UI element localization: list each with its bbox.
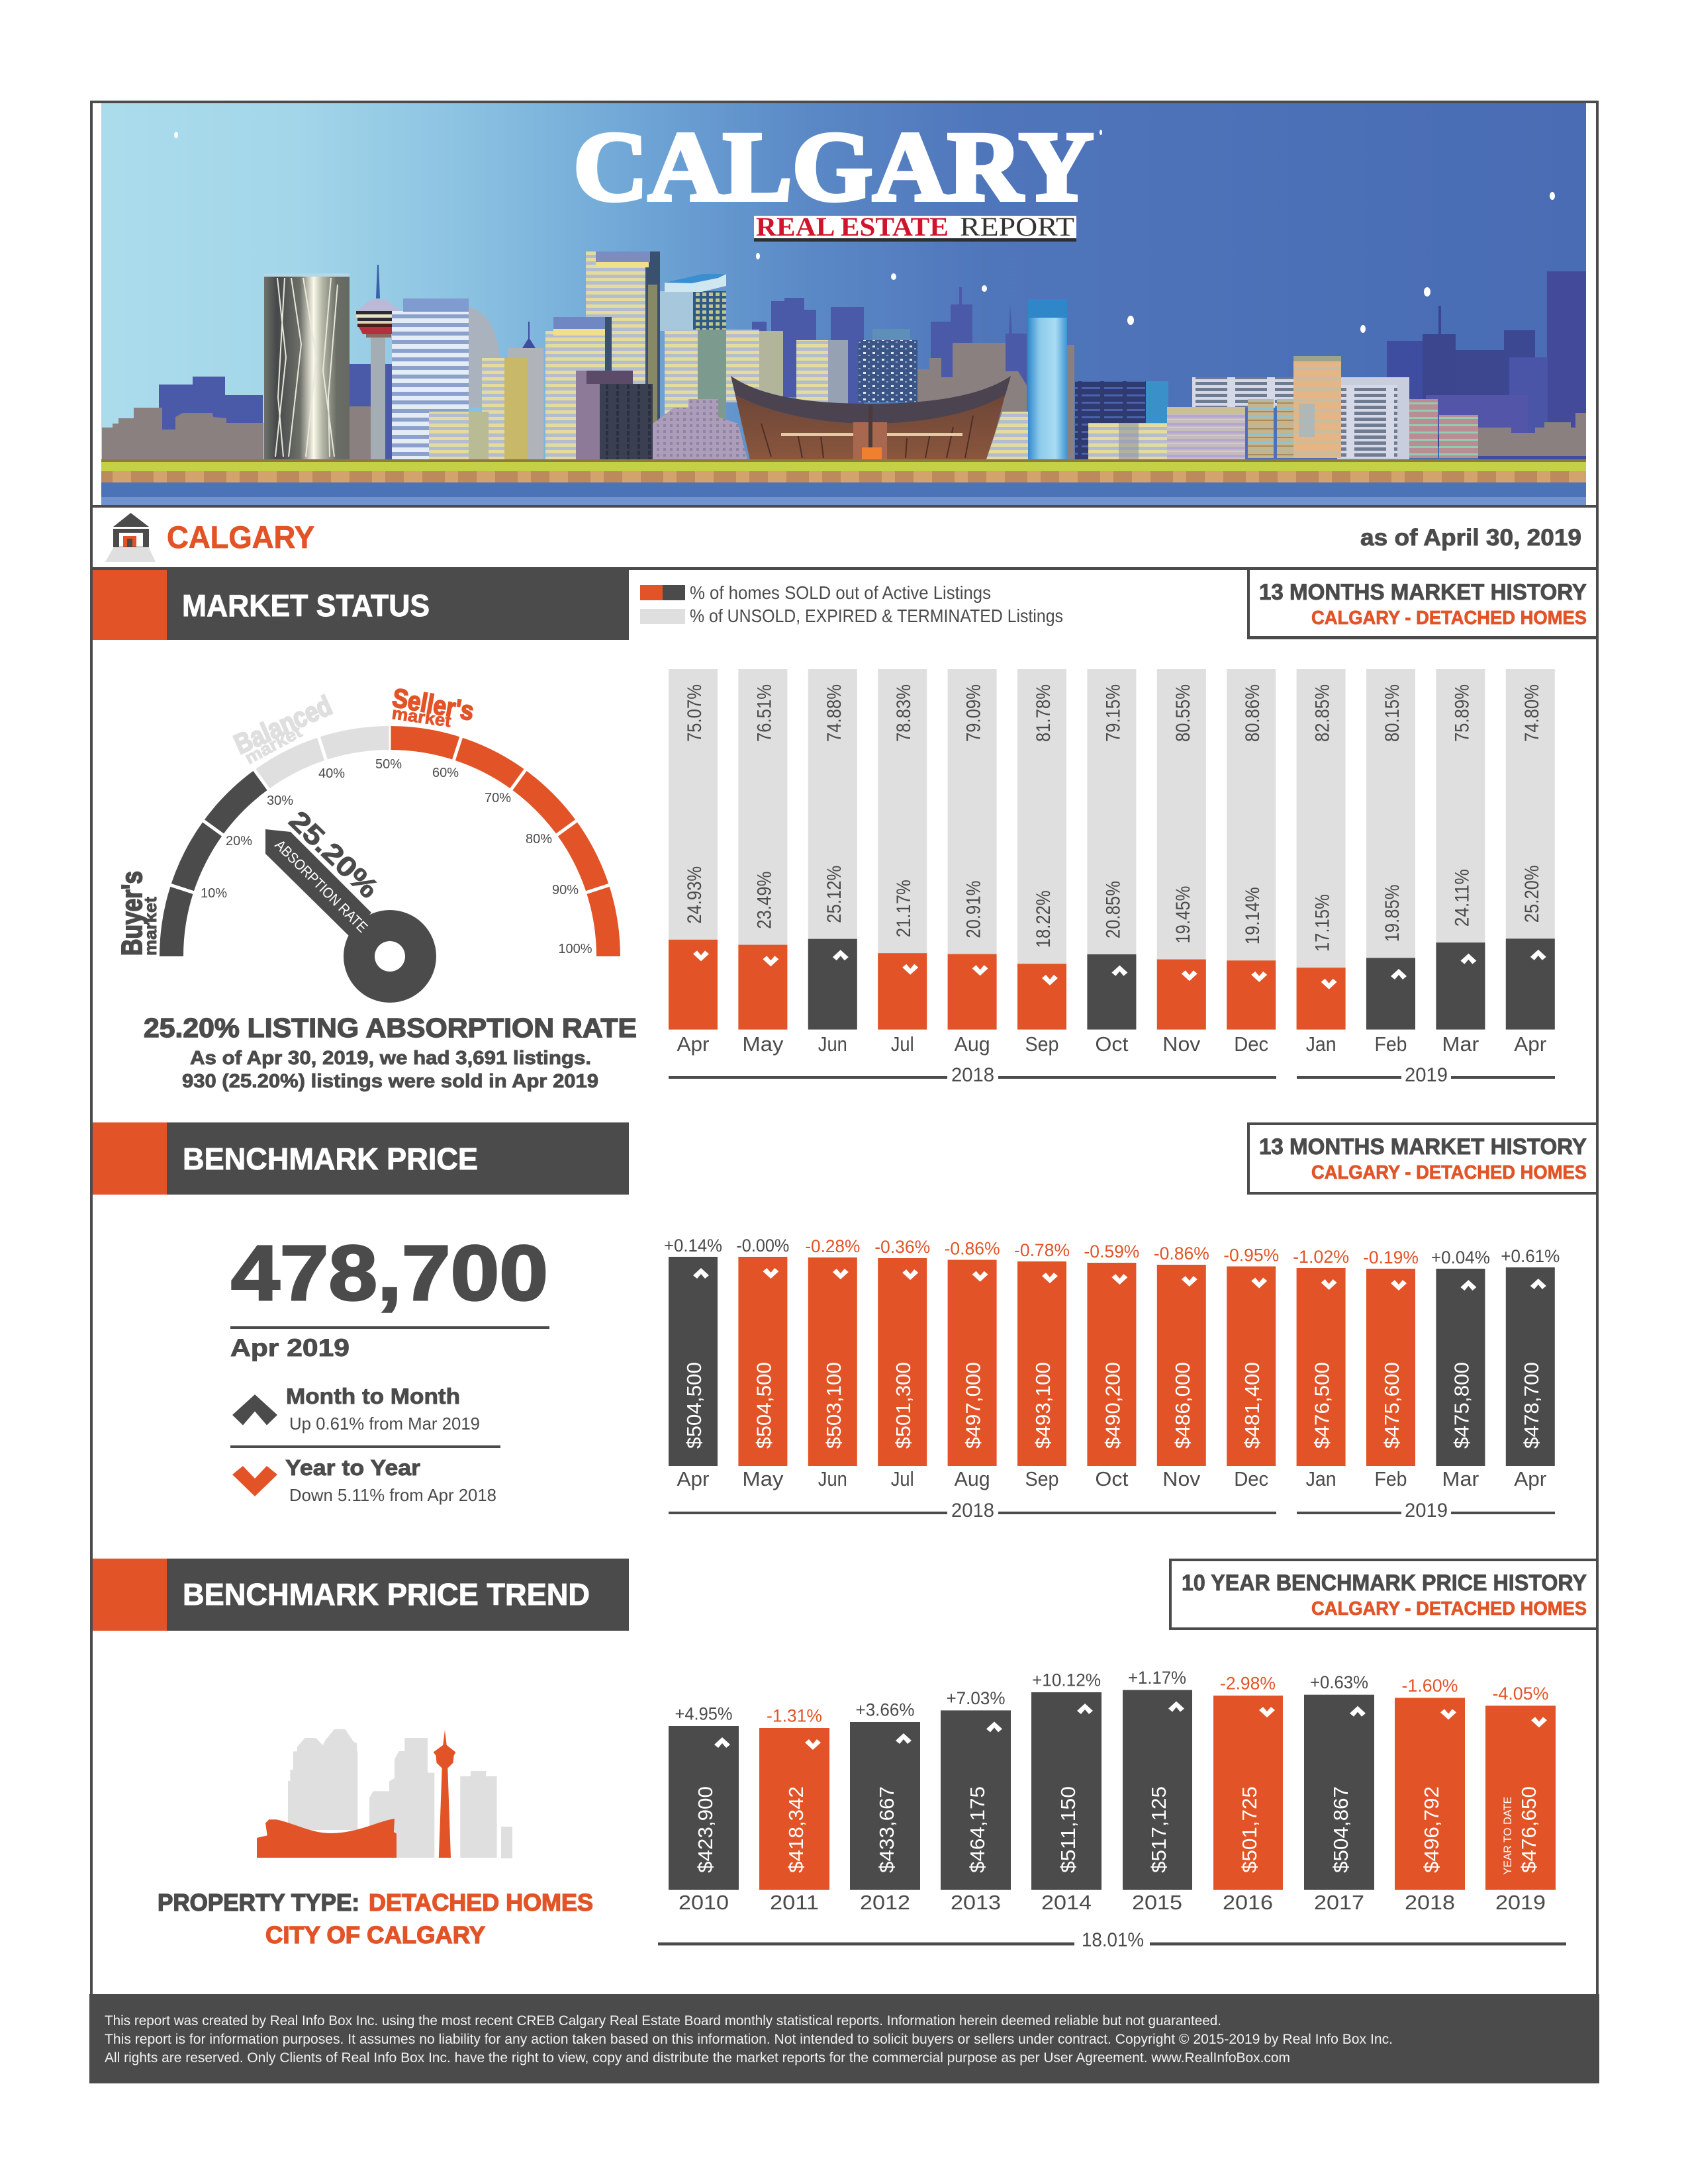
banner subtitle bbox=[754, 212, 1076, 242]
bar: Jul 2018: Jul bbox=[891, 1032, 914, 1056]
bar: Oct 2018 bbox=[1087, 669, 1136, 1056]
The Bow tower bbox=[264, 273, 350, 462]
grey skyline bbox=[102, 343, 1074, 462]
bar: Feb 2019 bbox=[1363, 1248, 1419, 1490]
bar: Oct 2018: Oct bbox=[1095, 1032, 1129, 1056]
bar: Sep 2018: Sep bbox=[1025, 1467, 1059, 1490]
month to month change: Month to Month bbox=[286, 1384, 460, 1408]
price value: 478,700 bbox=[231, 1230, 548, 1317]
bar: 2010: $423,900 bbox=[694, 1786, 717, 1873]
market zone labels: Balanced bbox=[230, 690, 336, 760]
bar: 2016: 2016 bbox=[1223, 1891, 1273, 1914]
bar: Nov 2018: $486,000 bbox=[1171, 1362, 1194, 1449]
report date: as of April 30, 2019 bbox=[1360, 525, 1581, 551]
market zone labels bbox=[116, 684, 476, 956]
bar: 2017: +0.63% bbox=[1310, 1672, 1368, 1692]
bar: Sep 2018: -0.78% bbox=[1014, 1240, 1070, 1260]
gauge needle: 25.20% bbox=[283, 805, 385, 904]
footer disclaimer: This report is for information purposes. It assumes no liability for any action taken based on this information. Not intended to solicit buyers or sellers under contract. Copyright © 2015-2019 by Real Info Box Inc. bbox=[105, 2032, 1393, 2047]
bar: Apr 2018: +0.14% bbox=[664, 1236, 722, 1255]
bar: Apr 2018: Apr bbox=[677, 1032, 710, 1056]
bar: Nov 2018: 19.45% bbox=[1172, 886, 1194, 944]
bar: Jan 2019 bbox=[1293, 1247, 1349, 1490]
year axis: 2018 bbox=[951, 1064, 994, 1086]
bar: 2014: +10.12% bbox=[1032, 1670, 1101, 1690]
bar: 2010: +4.95% bbox=[675, 1704, 732, 1723]
bar: May 2018 bbox=[738, 669, 787, 1056]
bar: 2011: $418,342 bbox=[784, 1786, 808, 1873]
absorption summary: As of Apr 30, 2019, we had 3,691 listings. bbox=[190, 1048, 591, 1069]
bar: 2019: -4.05% bbox=[1492, 1684, 1549, 1704]
bar: Jan 2019: 82.85% bbox=[1312, 684, 1334, 742]
bar: 2019 bbox=[1485, 1684, 1556, 1914]
bar: May 2018: May bbox=[742, 1467, 784, 1490]
bar: Jan 2019 bbox=[1297, 669, 1346, 1056]
month to month change bbox=[286, 1384, 480, 1433]
month to month change: Up 0.61% from Mar 2019 bbox=[289, 1414, 480, 1433]
bar: Sep 2018: 81.78% bbox=[1033, 684, 1055, 742]
bar: Jul 2018: 78.83% bbox=[893, 684, 915, 742]
bar: 2019: $476,650 bbox=[1517, 1786, 1540, 1873]
back skyline left bbox=[159, 287, 1027, 461]
bar: Sep 2018 bbox=[1014, 1240, 1070, 1490]
title box: 13 months market history: CALGARY - DETACHED HOMES bbox=[1311, 608, 1587, 629]
absorption summary: 930 (25.20%) listings were sold in Apr 2019 bbox=[182, 1071, 598, 1092]
Saddledome bbox=[731, 376, 1011, 461]
bar: Jun 2018: Jun bbox=[818, 1467, 847, 1490]
bar: 2013: +7.03% bbox=[947, 1688, 1005, 1708]
bar: May 2018: -0.00% bbox=[736, 1236, 789, 1255]
bar: Sep 2018 bbox=[1017, 669, 1066, 1056]
bar: 2012: 2012 bbox=[860, 1891, 910, 1914]
bar: 2014 bbox=[1031, 1670, 1102, 1914]
bar: 2012: +3.66% bbox=[855, 1700, 915, 1719]
bar: Jul 2018: 21.17% bbox=[893, 880, 915, 937]
icon: house bbox=[105, 513, 156, 562]
bar: 2010: 2010 bbox=[679, 1891, 729, 1914]
bar: Oct 2018: Oct bbox=[1095, 1467, 1129, 1490]
icon: down chevron bbox=[232, 1466, 277, 1496]
bar: 2011 bbox=[759, 1706, 829, 1914]
bar: Jun 2018: 74.88% bbox=[823, 684, 845, 742]
bar: Mar 2019: +0.04% bbox=[1431, 1248, 1490, 1267]
bar: May 2018: $504,500 bbox=[752, 1362, 775, 1449]
banner subtitle: REAL ESTATE bbox=[756, 212, 949, 242]
gauge scale labels: 40% bbox=[318, 766, 345, 781]
bar: Jul 2018 bbox=[878, 669, 927, 1056]
bar: 2011: -1.31% bbox=[767, 1706, 822, 1726]
bar: 2016 bbox=[1213, 1673, 1283, 1914]
bar: Apr 2019 bbox=[1506, 669, 1555, 1056]
title box: 13 months market history bbox=[1247, 567, 1599, 639]
bar: Mar 2019: Mar bbox=[1442, 1032, 1479, 1056]
gauge scale labels: 100% bbox=[558, 942, 592, 956]
year to year change bbox=[285, 1455, 496, 1505]
legend: % of UNSOLD, EXPIRED & TERMINATED Listings bbox=[690, 606, 1063, 626]
bar: Nov 2018: 80.55% bbox=[1172, 684, 1194, 742]
year to year change: Year to Year bbox=[285, 1455, 420, 1480]
gauge scale labels bbox=[201, 757, 592, 956]
bar: Dec 2018: 19.14% bbox=[1242, 887, 1264, 944]
bar: Apr 2018: 24.93% bbox=[684, 866, 706, 924]
title box: 13 months market history: 13 MONTHS MARKET HISTORY bbox=[1259, 580, 1587, 605]
bar: 2017 bbox=[1304, 1672, 1374, 1914]
price date: Apr 2019 bbox=[230, 1334, 350, 1361]
bar: 2015: +1.17% bbox=[1128, 1668, 1186, 1688]
market zone labels: Seller's bbox=[390, 684, 476, 726]
bar: 2015 bbox=[1123, 1668, 1192, 1914]
bar: Jan 2019: Jan bbox=[1306, 1467, 1336, 1490]
icon: up chevron bbox=[232, 1394, 277, 1426]
bar: Dec 2018 bbox=[1223, 1246, 1279, 1490]
bar: Apr 2019: $478,700 bbox=[1520, 1362, 1543, 1449]
Calgary Tower bbox=[356, 265, 401, 462]
market zone labels: market bbox=[242, 721, 305, 768]
bar: Oct 2018: 79.15% bbox=[1102, 684, 1124, 742]
footer disclaimer: All rights are reserved. Only Clients of Real Info Box Inc. have the right to view, copy and distribute the market reports for the commercial purpose as per User Agreement. www.RealInfoBox.com bbox=[105, 2050, 1290, 2066]
bar: Jul 2018: Jul bbox=[891, 1467, 914, 1490]
bar: Nov 2018: -0.86% bbox=[1154, 1244, 1209, 1263]
gauge scale labels: 90% bbox=[552, 883, 579, 897]
bar: Feb 2019: $475,600 bbox=[1380, 1362, 1403, 1449]
bar: Nov 2018 bbox=[1157, 669, 1206, 1056]
benchmark price summary bbox=[230, 1230, 549, 1505]
bar: Mar 2019: 75.89% bbox=[1451, 684, 1473, 742]
bar: Aug 2018: Aug bbox=[955, 1467, 990, 1490]
absorption summary bbox=[144, 1013, 637, 1092]
bar: 2013: 2013 bbox=[951, 1891, 1001, 1914]
bar chart: 13 months benchmark price bbox=[664, 1236, 1560, 1522]
bar: 2018 bbox=[1395, 1676, 1465, 1914]
bar: Aug 2018 bbox=[945, 1239, 1000, 1490]
bar: Jun 2018: 25.12% bbox=[823, 866, 845, 923]
icon: Calgary skyline silhouette bbox=[257, 1729, 512, 1858]
year to year change: Down 5.11% from Apr 2018 bbox=[289, 1485, 496, 1505]
bar: Apr 2018: Apr bbox=[677, 1467, 710, 1490]
bar: 2013: $464,175 bbox=[966, 1786, 989, 1873]
gauge arc bbox=[166, 721, 614, 956]
gauge scale labels: 20% bbox=[226, 834, 252, 848]
bar: Apr 2018: $504,500 bbox=[682, 1362, 706, 1449]
bar: Oct 2018: 20.85% bbox=[1102, 881, 1124, 938]
bar: Jul 2018: -0.36% bbox=[874, 1237, 930, 1257]
property type caption: PROPERTY TYPE: bbox=[158, 1889, 359, 1916]
bar: Mar 2019 bbox=[1431, 1248, 1490, 1490]
bar: 2014: 2014 bbox=[1041, 1891, 1092, 1914]
bar: Mar 2019 bbox=[1436, 669, 1485, 1056]
outer frame bbox=[90, 101, 1599, 2020]
bar: May 2018: 76.51% bbox=[753, 684, 775, 742]
gauge needle: ABSORPTION RATE bbox=[271, 837, 371, 936]
bar: Dec 2018: Dec bbox=[1234, 1032, 1268, 1056]
bar: Oct 2018 bbox=[1084, 1242, 1139, 1490]
bar: Feb 2019: Feb bbox=[1374, 1467, 1407, 1490]
bar: 2012: $433,667 bbox=[875, 1786, 898, 1873]
back skyline right bbox=[1387, 271, 1586, 460]
bar: Apr 2019: 74.80% bbox=[1521, 684, 1543, 742]
market zone labels: market bbox=[140, 897, 160, 956]
bar: Apr 2018: 75.07% bbox=[684, 684, 706, 742]
title box: 13 months price history: CALGARY - DETACHED HOMES bbox=[1311, 1162, 1587, 1183]
bar: Aug 2018 bbox=[948, 669, 997, 1056]
location name: CALGARY bbox=[167, 520, 314, 555]
bar: Aug 2018: -0.86% bbox=[945, 1239, 1000, 1259]
gauge scale labels: 30% bbox=[267, 794, 293, 808]
market zone labels: market bbox=[391, 703, 453, 731]
bar: May 2018: 23.49% bbox=[753, 872, 775, 929]
bar: 2018: 2018 bbox=[1405, 1891, 1455, 1914]
bar: Apr 2019: 25.20% bbox=[1521, 865, 1543, 923]
bar chart: 10 year benchmark price bbox=[658, 1668, 1566, 1951]
bar: Jan 2019: -1.02% bbox=[1293, 1247, 1349, 1267]
title box: 13 months price history: 13 MONTHS MARKET HISTORY bbox=[1259, 1134, 1587, 1160]
riverbank bbox=[101, 459, 1586, 506]
property type caption bbox=[158, 1889, 593, 1948]
year axis: 2019 bbox=[1405, 1500, 1448, 1522]
title box: 13 months price history bbox=[1247, 1122, 1599, 1195]
bar: 2015: $517,125 bbox=[1147, 1786, 1170, 1873]
stars bbox=[174, 130, 1555, 333]
bar: 2011: 2011 bbox=[770, 1891, 819, 1914]
bar: Dec 2018: $481,400 bbox=[1241, 1362, 1264, 1449]
gauge scale labels: 50% bbox=[375, 757, 402, 772]
bar: Mar 2019: 24.11% bbox=[1451, 869, 1473, 927]
bar: Apr 2019 bbox=[1501, 1246, 1560, 1490]
bar: 2018: -1.60% bbox=[1402, 1676, 1458, 1696]
bar: 2012 bbox=[850, 1700, 920, 1914]
bar: Dec 2018 bbox=[1227, 669, 1276, 1056]
total change axis: 18.01% bbox=[1082, 1929, 1144, 1951]
section heading: benchmark price bbox=[93, 1122, 629, 1195]
bar: Dec 2018: 80.86% bbox=[1242, 684, 1264, 742]
year axis: 2018 bbox=[951, 1500, 994, 1522]
bar: Aug 2018: Aug bbox=[955, 1032, 990, 1056]
footer disclaimer bbox=[89, 1994, 1599, 2083]
bar: Aug 2018: $497,000 bbox=[962, 1362, 985, 1449]
bar: Sep 2018: Sep bbox=[1025, 1032, 1059, 1056]
total change axis bbox=[658, 1929, 1566, 1951]
property type caption: DETACHED HOMES bbox=[369, 1889, 593, 1916]
bar: 2016: -2.98% bbox=[1220, 1673, 1276, 1693]
bar: 2019: 2019 bbox=[1495, 1891, 1546, 1914]
bar: Mar 2019: $475,800 bbox=[1450, 1362, 1473, 1449]
bar: Oct 2018: $490,200 bbox=[1101, 1362, 1124, 1449]
bar: Feb 2019: 80.15% bbox=[1382, 684, 1403, 742]
downtown towers bbox=[392, 251, 917, 462]
section heading: benchmark price: BENCHMARK PRICE bbox=[183, 1142, 478, 1176]
bar: 2017: 2017 bbox=[1314, 1891, 1364, 1914]
bar: 2016: $501,725 bbox=[1238, 1786, 1261, 1873]
gauge scale labels: 70% bbox=[485, 791, 511, 805]
bar: Jul 2018 bbox=[874, 1237, 930, 1490]
banner title: CALGARY bbox=[573, 112, 1094, 222]
bar: Sep 2018: 18.22% bbox=[1033, 890, 1055, 948]
section heading: market status: MARKET STATUS bbox=[182, 588, 430, 623]
legend bbox=[640, 582, 1063, 626]
property type caption: CITY OF CALGARY bbox=[265, 1921, 485, 1948]
location header bbox=[105, 513, 1581, 562]
bar: Jun 2018: -0.28% bbox=[805, 1236, 860, 1256]
year axis bbox=[669, 1064, 1555, 1086]
bar: Jun 2018 bbox=[808, 669, 857, 1056]
footer disclaimer: This report was created by Real Info Box Inc. using the most recent CREB Calgary Real Estate Board monthly statistical reports. Information herein deemed reliable but not guaranteed. bbox=[105, 2013, 1221, 2028]
bar: 2018: $496,792 bbox=[1420, 1786, 1443, 1873]
bar: Jan 2019: 17.15% bbox=[1312, 894, 1334, 952]
bar: Nov 2018: Nov bbox=[1162, 1467, 1201, 1490]
gauge scale labels: 10% bbox=[201, 886, 227, 901]
bar: May 2018 bbox=[736, 1236, 789, 1490]
bar: Feb 2019: 19.85% bbox=[1382, 884, 1403, 942]
market zone labels: Buyer's bbox=[116, 871, 148, 956]
bar: Sep 2018: $493,100 bbox=[1031, 1362, 1055, 1449]
bar: 2013 bbox=[941, 1688, 1011, 1914]
bar: Apr 2019: +0.61% bbox=[1501, 1246, 1560, 1266]
bar: Apr 2019: Apr bbox=[1514, 1467, 1546, 1490]
bar: 2015: 2015 bbox=[1132, 1891, 1182, 1914]
banner: Calgary skyline illustration bbox=[101, 103, 1586, 506]
stacked bar chart: 13 months absorption bbox=[669, 669, 1555, 1086]
section heading: benchmark price trend bbox=[93, 1559, 629, 1631]
bar: Nov 2018 bbox=[1154, 1244, 1209, 1490]
gauge scale labels: 60% bbox=[432, 766, 459, 780]
bar: 2010 bbox=[669, 1704, 739, 1914]
bar: Apr 2019: Apr bbox=[1514, 1032, 1546, 1056]
absorption summary: 25.20% LISTING ABSORPTION RATE bbox=[144, 1013, 637, 1043]
bar: Apr 2018 bbox=[669, 669, 718, 1056]
bar: Feb 2019: -0.19% bbox=[1363, 1248, 1419, 1267]
bar: 2014: $511,150 bbox=[1056, 1786, 1080, 1873]
bar: Jan 2019: $476,500 bbox=[1311, 1362, 1334, 1449]
bar: Jun 2018 bbox=[805, 1236, 860, 1490]
bar: 2017: $504,867 bbox=[1329, 1786, 1352, 1873]
bar: May 2018: May bbox=[742, 1032, 784, 1056]
bar: Feb 2019: Feb bbox=[1374, 1032, 1407, 1056]
title box: 10 year history bbox=[1169, 1559, 1599, 1630]
gauge scale labels: 80% bbox=[526, 832, 552, 846]
title box: 10 year history: 10 YEAR BENCHMARK PRICE HISTORY bbox=[1182, 1570, 1587, 1596]
title box: 10 year history: CALGARY - DETACHED HOMES bbox=[1311, 1598, 1587, 1619]
bar: Jun 2018: $503,100 bbox=[822, 1362, 845, 1449]
year axis bbox=[669, 1500, 1555, 1522]
bar: Apr 2018 bbox=[664, 1236, 722, 1490]
bar: Mar 2019: Mar bbox=[1442, 1467, 1479, 1490]
bar: Nov 2018: Nov bbox=[1162, 1032, 1201, 1056]
right-side towers bbox=[986, 299, 1478, 459]
legend: % of homes SOLD out of Active Listings bbox=[690, 582, 991, 603]
bar: Aug 2018: 20.91% bbox=[963, 881, 985, 938]
bar: Feb 2019 bbox=[1366, 669, 1415, 1056]
bar: Aug 2018: 79.09% bbox=[963, 684, 985, 742]
section heading: market status bbox=[93, 570, 629, 640]
bar: Jun 2018: Jun bbox=[818, 1032, 847, 1056]
bar: Oct 2018: -0.59% bbox=[1084, 1242, 1139, 1261]
bar: Dec 2018: Dec bbox=[1234, 1467, 1268, 1490]
bar: Dec 2018: -0.95% bbox=[1223, 1246, 1279, 1265]
bar: 2019: YEAR TO DATE bbox=[1501, 1797, 1514, 1875]
bar: Jan 2019: Jan bbox=[1306, 1032, 1336, 1056]
section heading: benchmark price trend: BENCHMARK PRICE TREND bbox=[183, 1577, 590, 1612]
year axis: 2019 bbox=[1405, 1064, 1448, 1086]
gauge needle bbox=[265, 805, 436, 1003]
banner subtitle: REPORT bbox=[960, 212, 1074, 242]
gauge: listing absorption rate bbox=[116, 684, 614, 1003]
bar: Jul 2018: $501,300 bbox=[892, 1362, 915, 1449]
